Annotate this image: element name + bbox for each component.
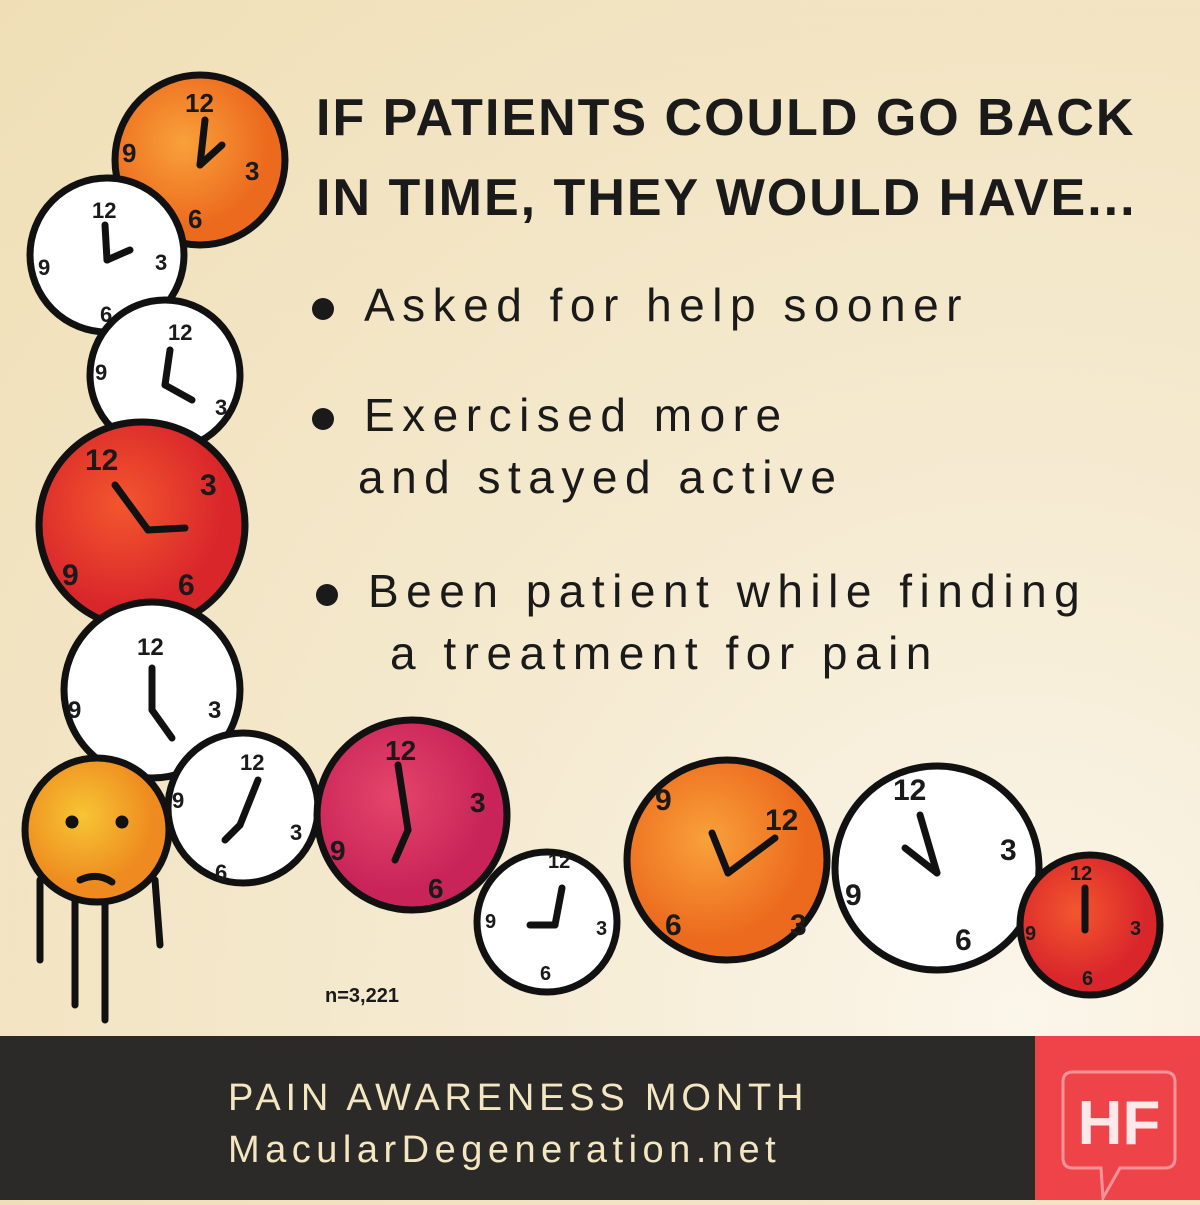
clock 11 red: 12: [1070, 863, 1092, 885]
footer bar: [0, 1036, 1200, 1200]
clock 10 white: [835, 766, 1039, 970]
clock 3 white: 12: [168, 320, 192, 345]
clock 9 orange: 3: [790, 909, 807, 942]
clock 7 pink: 6: [428, 873, 444, 904]
clock 2 white: 6: [100, 302, 112, 327]
clock 11 red: 9: [1025, 923, 1036, 945]
title: IF PATIENTS COULD GO BACK: [316, 89, 1135, 147]
clock 8 white: 6: [540, 963, 551, 985]
clock 10 white: 6: [955, 924, 972, 957]
bullet 3: a treatment for pain: [390, 627, 939, 679]
clock 3 white: 3: [215, 395, 227, 420]
clock 2 white: 12: [92, 198, 116, 223]
clock 5 white: 12: [137, 634, 164, 661]
footer text: PAIN AWARENESS MONTH: [228, 1077, 808, 1119]
clock 4 red: 6: [178, 569, 195, 602]
clock 6 white: 6: [215, 860, 227, 885]
clock 10 white: 3: [1000, 834, 1017, 867]
clock 9 orange: 12: [765, 804, 798, 837]
clock 11 red: [1020, 855, 1160, 995]
clock 1 orange: 3: [245, 156, 259, 186]
clock 4 red: 3: [200, 469, 217, 502]
clock 10 white: 12: [893, 774, 926, 807]
clock 6 white: 12: [240, 750, 264, 775]
clock 2 white: 9: [38, 255, 50, 280]
clock 1 orange: 6: [188, 204, 202, 234]
clock 4 red: 9: [62, 559, 79, 592]
clock 4 red: 12: [85, 444, 118, 477]
HF logo: HF: [1078, 1089, 1160, 1158]
clock 11 red: 6: [1082, 968, 1093, 990]
bullet 3: Been patient while finding: [368, 565, 1087, 617]
clock 7 pink: [317, 720, 507, 910]
clock 8 white: 12: [548, 851, 570, 873]
clock 1 orange: [115, 75, 285, 245]
clock 2 white: [30, 178, 184, 332]
clock 3 white: [90, 300, 240, 450]
clock 2 white: 3: [155, 250, 167, 275]
HF logo: [1035, 1036, 1200, 1200]
title: [316, 89, 1137, 227]
bullet 2: and stayed active: [358, 451, 844, 503]
footer text: MacularDegeneration.net: [228, 1129, 781, 1171]
clock 9 orange: 9: [655, 784, 672, 817]
character: [25, 758, 169, 1020]
clock 6 white: 9: [172, 788, 184, 813]
bullet 2: Exercised more: [364, 389, 789, 441]
clock 6 white: [168, 733, 318, 885]
clock 5 white: 9: [68, 697, 81, 724]
clock 1 orange: 9: [122, 138, 136, 168]
clock 8 white: [477, 851, 617, 992]
bullet 1: Asked for help sooner: [364, 279, 969, 331]
clock 11 red: 3: [1130, 918, 1141, 940]
clock 8 white: 3: [596, 918, 607, 940]
sample size: n=3,221: [325, 985, 399, 1007]
clock 5 white: [64, 602, 240, 778]
clock 6 white: 3: [290, 820, 302, 845]
bullet 2: [312, 389, 844, 503]
clock 8 white: 9: [485, 911, 496, 933]
clock 1 orange: 12: [185, 88, 214, 118]
title: IN TIME, THEY WOULD HAVE...: [316, 169, 1137, 227]
clock 9 orange: [627, 760, 827, 960]
clock 5 white: 3: [208, 697, 221, 724]
clock 7 pink: 12: [385, 735, 416, 766]
bullet 3: [316, 565, 1087, 679]
clock 10 white: 9: [845, 879, 862, 912]
clock 7 pink: 3: [470, 787, 486, 818]
clock 4 red: [39, 422, 245, 628]
clock 9 orange: 6: [665, 909, 682, 942]
footer text: [228, 1077, 808, 1171]
clock 3 white: 9: [95, 360, 107, 385]
clock 7 pink: 9: [330, 835, 346, 866]
